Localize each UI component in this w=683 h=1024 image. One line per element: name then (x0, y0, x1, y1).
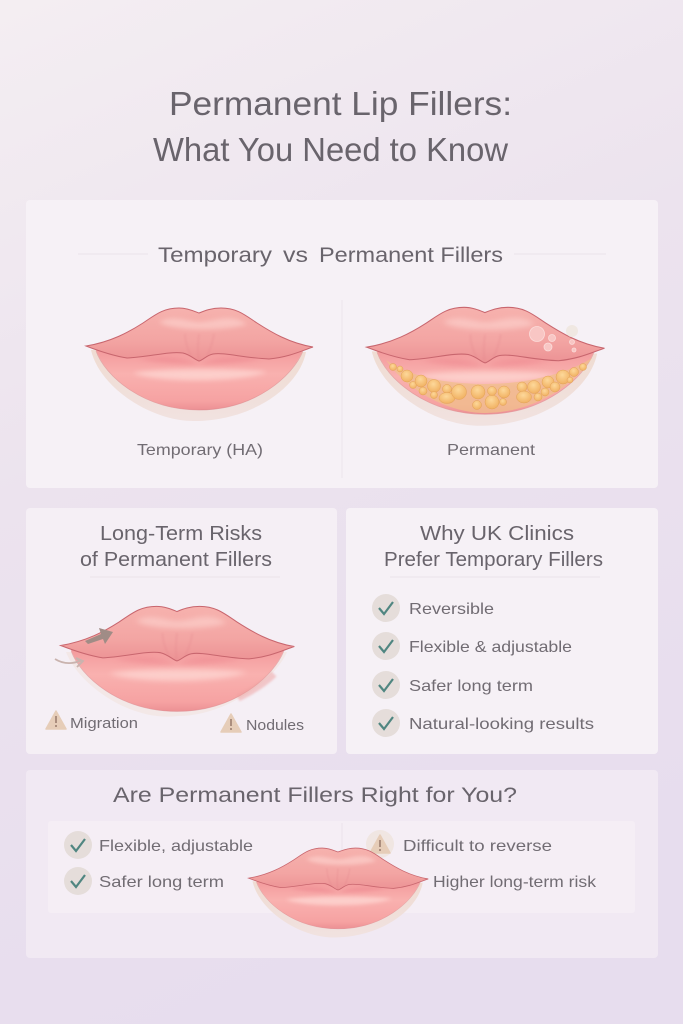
heading: temporary vs permanent: vs (283, 244, 308, 267)
warning: migration: Migration (70, 715, 138, 732)
illustration: permanent filler lips (367, 307, 604, 426)
nodules texture (238, 674, 274, 698)
item: difficult to reverse (366, 830, 552, 858)
item: safer long term (64, 867, 224, 895)
item: natural-looking results: Natural-looking results (409, 716, 594, 733)
item: reversible: Reversible (409, 601, 494, 618)
item: flexible and adjustable (372, 632, 572, 660)
label: permanent: Permanent (447, 442, 536, 459)
item: safer long term (372, 671, 533, 699)
panel: are permanent fillers right for you (26, 770, 658, 958)
item: higher long-term risk: Higher long-term risk (433, 874, 597, 891)
heading: why UK clinics: Why UK Clinics (420, 523, 574, 545)
panel: temporary vs permanent fillers (26, 200, 658, 488)
title (153, 85, 512, 168)
illustration: temporary filler lips (86, 308, 313, 421)
heading: long-term risks: Long-Term Risks (100, 523, 262, 545)
heading: why UK clinics: Prefer Temporary Fillers (384, 549, 603, 571)
heading: right for you: Are Permanent Fillers Right for You? (113, 784, 517, 807)
item: safer long term: Safer long term (409, 678, 533, 695)
illustration: lips (249, 848, 428, 938)
heading: temporary vs permanent: Permanent Fillers (319, 244, 503, 267)
title: Permanent Lip Fillers: (169, 85, 512, 122)
panel: long-term risks (26, 508, 337, 754)
heading: long-term risks: of Permanent Fillers (80, 549, 272, 571)
heading: temporary vs permanent: Temporary (158, 244, 273, 267)
item: flexible, adjustable (64, 831, 253, 859)
arrow: upper migration (85, 628, 113, 644)
item: safer long term: Safer long term (99, 874, 224, 891)
warning: migration (46, 711, 138, 732)
item: natural-looking results (372, 709, 594, 737)
label: temporary (HA): Temporary (HA) (137, 442, 263, 459)
comparison box (48, 821, 635, 913)
item: flexible, adjustable: Flexible, adjustable (99, 838, 253, 855)
title: What You Need to Know (153, 131, 508, 168)
illustration: lips with risks (55, 606, 294, 717)
heading: temporary vs permanent (158, 244, 503, 267)
arrow: lower migration (55, 658, 83, 667)
heading: long-term risks (80, 523, 272, 571)
warning: nodules (221, 714, 304, 734)
heading: why UK clinics (384, 523, 603, 571)
item: flexible and adjustable: Flexible & adjustable (409, 639, 572, 656)
item: difficult to reverse: Difficult to reverse (403, 838, 552, 855)
item: reversible (372, 594, 494, 622)
warning: nodules: Nodules (246, 717, 304, 734)
panel: why UK clinics prefer temporary fillers (346, 508, 658, 754)
